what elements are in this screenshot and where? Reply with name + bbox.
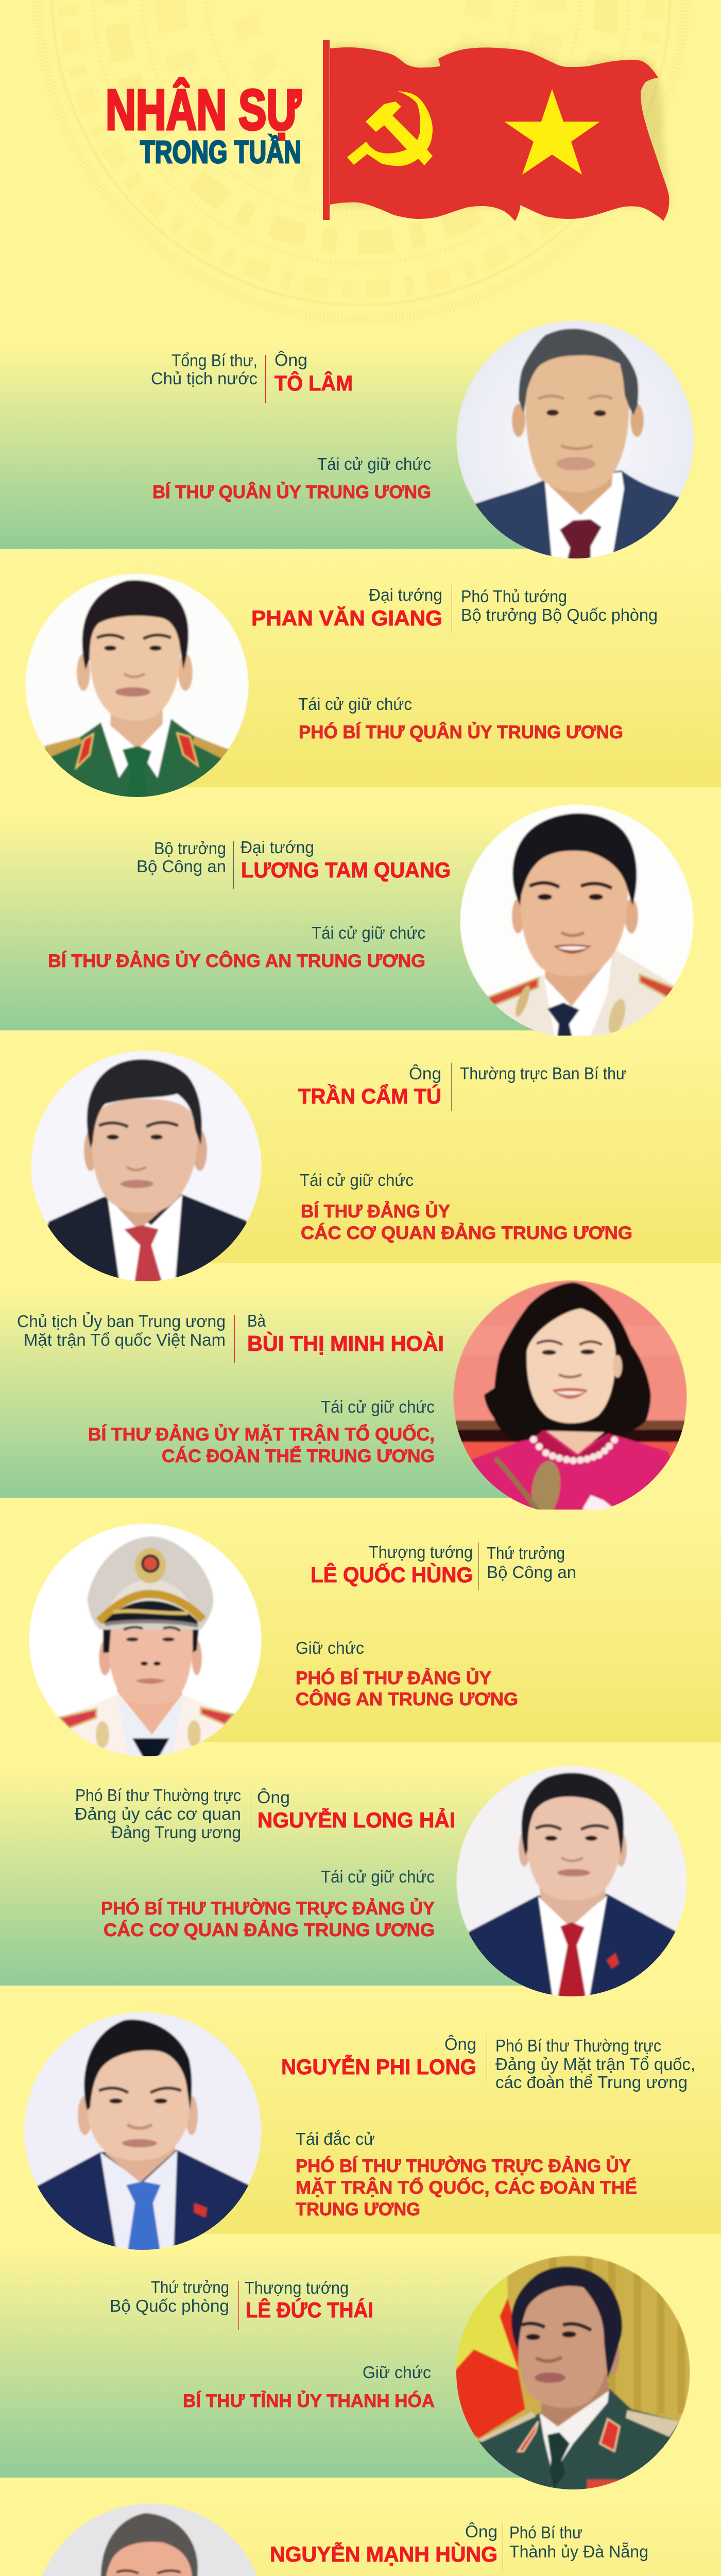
- role: [75, 1786, 290, 1842]
- portrait: [19, 573, 255, 804]
- role: Thành ủy Đà Nẵng: [509, 2542, 648, 2561]
- portrait: [22, 1523, 269, 1764]
- position: CÁC CƠ QUAN ĐẢNG TRUNG ƯƠNG: [301, 1223, 632, 1243]
- name: NGUYỄN LONG HẢI: [258, 1807, 455, 1832]
- role: [17, 1311, 266, 1363]
- position: MẶT TRẬN TỔ QUỐC, CÁC ĐOÀN THỂ: [296, 2177, 637, 2198]
- name: PHAN VĂN GIANG: [251, 606, 442, 630]
- position label: Tái cử giữ chức: [321, 1397, 435, 1416]
- portrait: [448, 1766, 695, 2005]
- portrait: [450, 2254, 697, 2496]
- green gradient band: [0, 2251, 573, 2478]
- role: Thứ trưởng: [151, 2278, 229, 2297]
- title: Nhân sự trong tuần: [106, 78, 302, 170]
- position: PHÓ BÍ THƯ ĐẢNG ỦY: [296, 1668, 491, 1688]
- icon: yellow star: [504, 89, 600, 175]
- position: [296, 2156, 637, 2219]
- position: [296, 1668, 518, 1709]
- position: TRUNG ƯƠNG: [296, 2199, 420, 2219]
- role: Phó Bí thư Thường trực: [495, 2036, 661, 2055]
- role: Bộ trưởng: [154, 839, 226, 858]
- portrait: [456, 320, 699, 563]
- name: LÊ ĐỨC THÁI: [246, 2297, 373, 2322]
- person 1: Tô Lâm: [0, 320, 699, 563]
- role: Thứ trưởng: [487, 1544, 565, 1563]
- role: [444, 2035, 695, 2092]
- position: [88, 1424, 435, 1466]
- role: Ông: [257, 1788, 290, 1807]
- position: CÁC CƠ QUAN ĐẢNG TRUNG ƯƠNG: [104, 1920, 435, 1940]
- role: Ông: [409, 1064, 441, 1083]
- position: PHÓ BÍ THƯ THƯỜNG TRỰC ĐẢNG ỦY: [296, 2156, 631, 2176]
- person 2: Phan Văn Giang: [19, 562, 721, 804]
- portrait: [453, 804, 700, 1045]
- position: BÍ THƯ TỈNH ỦY THANH HÓA: [183, 2391, 435, 2411]
- icon: party flag: [323, 40, 670, 221]
- person 6: Lê Quốc Hùng: [22, 1510, 721, 1764]
- person 8: Nguyễn Phi Long: [19, 1996, 721, 2255]
- position label: Tái cử giữ chức: [298, 694, 412, 714]
- role: Phó Thủ tướng: [461, 587, 567, 606]
- drum watermark background: [38, 0, 684, 319]
- position: BÍ THƯ ĐẢNG ỦY: [301, 1201, 450, 1222]
- role: [369, 1543, 576, 1590]
- position: [301, 1201, 632, 1243]
- role: Thường trực Ban Bí thư: [460, 1064, 626, 1083]
- yellow gradient band: [145, 1510, 721, 1742]
- name: TÔ LÂM: [274, 370, 353, 395]
- role: Phó Bí thư: [509, 2523, 582, 2542]
- role: Thượng tướng: [245, 2278, 349, 2297]
- role: Đại tướng: [369, 585, 442, 604]
- position: BÍ THƯ ĐẢNG ỦY CÔNG AN TRUNG ƯƠNG: [48, 951, 425, 971]
- role: Bộ Công an: [487, 1563, 576, 1582]
- person 9: Lê Đức Thái: [0, 2251, 697, 2496]
- position: PHÓ BÍ THƯ QUÂN ỦY TRUNG ƯƠNG: [299, 722, 623, 742]
- position label: Tái cử giữ chức: [312, 923, 425, 942]
- name: BÙI THỊ MINH HOÀI: [247, 1331, 444, 1355]
- yellow gradient band: [146, 1036, 721, 1263]
- role: Bộ trưởng Bộ Quốc phòng: [461, 605, 658, 624]
- portrait: [23, 1050, 270, 1290]
- green gradient band: [0, 345, 575, 549]
- role: các đoàn thể Trung ương: [495, 2073, 688, 2092]
- role: Đảng ủy Mặt trận Tổ quốc,: [495, 2055, 695, 2074]
- position: PHÓ BÍ THƯ THƯỜNG TRỰC ĐẢNG ỦY: [101, 1898, 435, 1919]
- role: Bà: [247, 1311, 266, 1330]
- role: [465, 2522, 648, 2570]
- position label: Tái cử giữ chức: [321, 1867, 435, 1886]
- person 4: Trần Cẩm Tú: [23, 1036, 721, 1290]
- title: Nhân sự trong tuần: TRONG TUẦN: [140, 134, 301, 170]
- person 10: Nguyễn Mạnh Hùng: [26, 2499, 721, 2576]
- role: [409, 1063, 626, 1111]
- role: [369, 585, 658, 634]
- position label: Tái cử giữ chức: [317, 454, 431, 473]
- position: CÔNG AN TRUNG ƯƠNG: [296, 1689, 518, 1709]
- position label: Giữ chức: [296, 1638, 364, 1657]
- person 5: Bùi Thị Minh Hoài: [0, 1280, 694, 1521]
- role: Đảng Trung ương: [111, 1823, 241, 1842]
- role: [151, 350, 307, 403]
- position label: Tái cử giữ chức: [300, 1171, 414, 1190]
- role: Ông: [444, 2035, 476, 2054]
- role: [136, 838, 314, 889]
- yellow gradient band: [150, 2499, 721, 2576]
- person 7: Nguyễn Long Hải: [0, 1766, 695, 2005]
- person 3: Lương Tam Quang: [0, 804, 700, 1045]
- role: Bộ Công an: [136, 857, 226, 876]
- role: Chủ tịch Ủy ban Trung ương: [17, 1312, 226, 1331]
- role: Tổng Bí thư,: [171, 351, 258, 370]
- position: CÁC ĐOÀN THỂ TRUNG ƯƠNG: [162, 1446, 435, 1466]
- role: Ông: [465, 2522, 497, 2541]
- green gradient band: [0, 1288, 570, 1498]
- position: [101, 1898, 435, 1940]
- position label: Giữ chức: [363, 2363, 431, 2382]
- name: LƯƠNG TAM QUANG: [241, 858, 451, 882]
- name: TRẦN CẨM TÚ: [298, 1083, 441, 1108]
- role: [110, 2278, 349, 2330]
- role: Phó Bí thư Thường trực: [75, 1786, 241, 1805]
- role: Mặt trận Tổ quốc Việt Nam: [24, 1330, 226, 1349]
- position label: Tái đắc cử: [296, 2129, 375, 2148]
- green gradient band: [0, 1772, 572, 1986]
- position: BÍ THƯ ĐẢNG ỦY MẶT TRẬN TỔ QUỐC,: [88, 1424, 435, 1445]
- position: BÍ THƯ QUÂN ỦY TRUNG ƯƠNG: [152, 482, 431, 502]
- green gradient band: [0, 819, 577, 1030]
- name: LÊ QUỐC HÙNG: [311, 1562, 473, 1587]
- icon: hammer and sickle: [347, 91, 433, 166]
- name: NGUYỄN MẠNH HÙNG: [270, 2541, 497, 2566]
- title: Nhân sự trong tuần: NHÂN SỰ: [106, 78, 302, 142]
- role: Ông: [274, 350, 307, 369]
- portrait: [19, 2012, 266, 2255]
- yellow gradient band: [137, 562, 721, 787]
- role: Chủ tịch nước: [151, 369, 258, 388]
- yellow gradient band: [143, 1996, 721, 2234]
- role: Đại tướng: [241, 838, 314, 857]
- role: Đảng ủy các cơ quan: [75, 1804, 241, 1823]
- portrait: [447, 1280, 694, 1521]
- role: Thượng tướng: [369, 1543, 473, 1562]
- name: NGUYỄN PHI LONG: [281, 2054, 476, 2079]
- portrait: [42, 2503, 258, 2576]
- role: Bộ Quốc phòng: [110, 2296, 229, 2315]
